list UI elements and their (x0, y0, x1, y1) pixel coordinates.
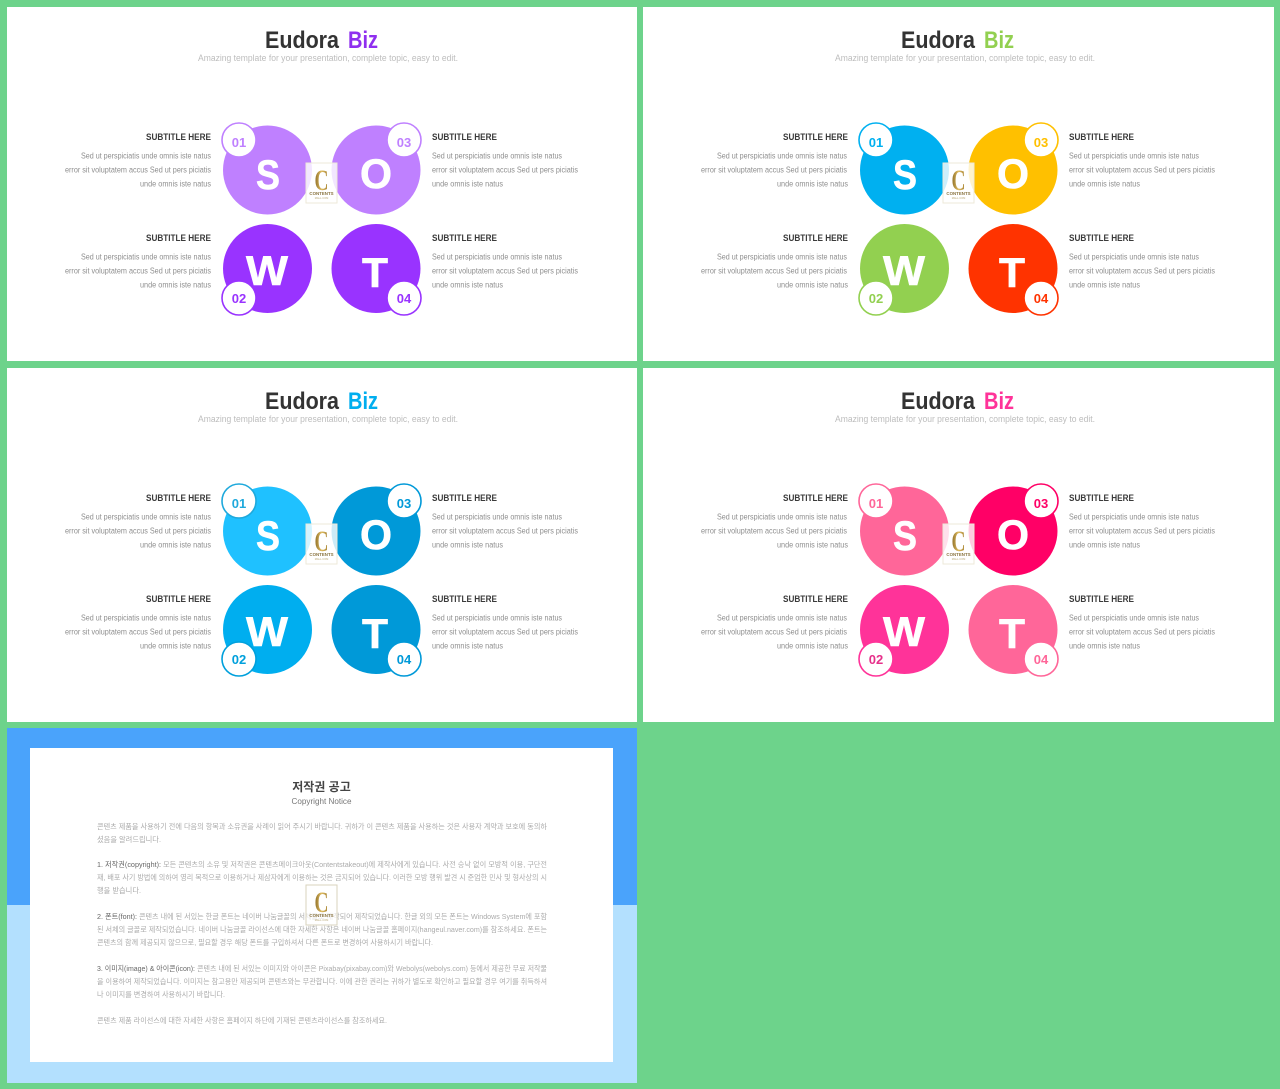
circle W: W (246, 247, 288, 294)
text block: T (1069, 233, 1215, 290)
circle O: O (997, 150, 1029, 197)
text block: W: Sed ut perspiciatis unde omnis iste natus (717, 614, 847, 622)
logo: CONTENTS (309, 552, 334, 557)
text block: O: SUBTITLE HERE (1069, 493, 1134, 503)
text block: S: unde omnis iste natus (140, 180, 211, 188)
text block: W: unde omnis iste natus (777, 280, 848, 290)
copyright heading: Copyright Notice (292, 796, 352, 806)
text block: W: Sed ut perspiciatis unde omnis iste natus (81, 252, 211, 262)
logo: MALL.COM (315, 196, 328, 200)
logo (943, 163, 974, 203)
logo: MALL.COM (952, 557, 965, 561)
circle O: 03 (1034, 135, 1048, 150)
text block: T: SUBTITLE HERE (432, 594, 497, 604)
text block: W: error sit voluptatem accus Sed ut pers piciatis (65, 628, 211, 636)
text block: O: error sit voluptatem accus Sed ut pers piciatis (432, 166, 578, 174)
logo: CONTENTS (946, 552, 971, 557)
text block: W: unde omnis iste natus (140, 642, 211, 650)
text block: O: error sit voluptatem accus Sed ut pers piciatis (1069, 166, 1215, 174)
circle W: 02 (232, 291, 246, 306)
text block: T (432, 594, 578, 650)
logo: C (314, 886, 328, 919)
text block: S (701, 132, 848, 188)
circle T: 04 (1034, 291, 1049, 306)
circle T: T (999, 610, 1025, 657)
panel: copyright notice (7, 728, 637, 1083)
text block: S: SUBTITLE HERE (146, 493, 211, 503)
panel: purple SWOT slide (7, 7, 637, 361)
circle O (332, 484, 421, 576)
circle S: 01 (232, 135, 246, 150)
text block: W (701, 594, 848, 650)
section 1: copyright: 모든 콘텐츠의 소유 및 저작권은 콘텐츠메이크아웃(Contentstakeout)에 제작사에게 있습니다. 사전 승낙 없이 모방적 이용, 구단전 (163, 859, 547, 869)
text block: W: unde omnis iste natus (777, 642, 848, 650)
text block: T: error sit voluptatem accus Sed ut pers piciatis (432, 628, 578, 636)
text block: W: SUBTITLE HERE (783, 594, 848, 604)
circle W (859, 224, 949, 315)
intro paragraph (97, 821, 547, 844)
text block: W (701, 233, 848, 290)
text block: S: error sit voluptatem accus Sed ut pers piciatis (65, 526, 211, 536)
logo: CONTENTS (946, 191, 971, 196)
circle S: 01 (232, 496, 246, 511)
circle O (968, 123, 1058, 214)
panel: multicolour SWOT slide (643, 7, 1274, 361)
text block: T (1069, 594, 1215, 650)
text block: T: unde omnis iste natus (1069, 280, 1140, 290)
text block: W: error sit voluptatem accus Sed ut pers piciatis (701, 266, 847, 276)
circle W: 02 (869, 652, 883, 667)
text block: T: error sit voluptatem accus Sed ut pers piciatis (1069, 628, 1215, 636)
text block: W: unde omnis iste natus (140, 280, 211, 290)
text block: S: Sed ut perspiciatis unde omnis iste natus (717, 152, 847, 160)
text block: O: Sed ut perspiciatis unde omnis iste natus (432, 152, 562, 160)
text block: T: unde omnis iste natus (432, 280, 503, 290)
text block: S: error sit voluptatem accus Sed ut pers piciatis (701, 526, 847, 536)
circle W (222, 585, 312, 676)
intro paragraph: 셨음을 알려드립니다. (97, 834, 161, 844)
text block: T: unde omnis iste natus (1069, 642, 1140, 650)
section 3: image and icon: 을 이용하여 제작되었습니다. 이미지는 참고용만 제공되며 콘텐츠와는 무관합니다. 이에 관한 권리는 귀하가 별도로 확인하고 필요할 경우 여기를 취득하셔 (97, 976, 547, 986)
circle S: S (893, 151, 917, 198)
text block: T: Sed ut perspiciatis unde omnis iste natus (1069, 252, 1199, 262)
text block: O: SUBTITLE HERE (432, 493, 497, 503)
text block: S: unde omnis iste natus (777, 540, 848, 550)
logo (306, 163, 337, 203)
text block: W (65, 594, 211, 650)
circle T: 04 (397, 291, 412, 306)
title: Eudora (901, 388, 976, 415)
circle O (332, 123, 421, 214)
circle S: S (893, 512, 917, 559)
tagline: Amazing template for your presentation, complete topic, easy to edit. (198, 414, 458, 424)
text block: O: Sed ut perspiciatis unde omnis iste natus (1069, 152, 1199, 160)
text block: O: unde omnis iste natus (432, 540, 503, 550)
text block: T: Sed ut perspiciatis unde omnis iste natus (1069, 614, 1199, 622)
logo (306, 524, 337, 564)
title: Eudora (265, 388, 340, 415)
text block: T: Sed ut perspiciatis unde omnis iste natus (432, 614, 562, 622)
circle T (968, 224, 1058, 315)
logo: MALL.COM (952, 196, 965, 200)
circle T: 04 (1034, 652, 1049, 667)
logo: CONTENTS (309, 913, 334, 918)
circle W: W (246, 608, 288, 655)
text block: O (432, 132, 578, 188)
text block: O (1069, 132, 1215, 188)
circle W: W (883, 608, 925, 655)
text block: T: Sed ut perspiciatis unde omnis iste natus (432, 252, 562, 262)
panel: pink SWOT slide (643, 368, 1274, 722)
logo: MALL.COM (315, 918, 328, 922)
section 1: copyright (97, 859, 547, 895)
circle T (332, 224, 421, 315)
circle S (222, 484, 312, 576)
circle S: S (256, 151, 280, 198)
circle S (859, 484, 949, 576)
logo (306, 885, 337, 925)
text block: O (432, 493, 578, 550)
section 2: font: 된 서체의 글꼴로 제작되었습니다. 네이버 나눔글꼴 라이선스에 대한 자세한 사항은 네이버 나눔글꼴 홈페이지(hangeul.naver.com)를 참조하세요. 폰트는 (97, 924, 547, 934)
closing line: 콘텐츠 제품 라이선스에 대한 자세한 사항은 홈페이지 하단에 기재된 콘텐츠라이선스를 참조하세요. (97, 1015, 387, 1025)
section 3: image and icon: 콘텐츠 내에 된 서있는 이미지와 아이콘은 Pixabay(pixabay.com)와 Webolys(webolys.com) 등에서 제공한 무료 저작물 (197, 963, 547, 973)
text block: S: unde omnis iste natus (777, 180, 848, 188)
text block: O: error sit voluptatem accus Sed ut pers piciatis (432, 526, 578, 536)
text block: S: Sed ut perspiciatis unde omnis iste natus (81, 512, 211, 522)
panel: blue SWOT slide (7, 368, 637, 722)
circle T: T (362, 249, 388, 296)
text block: O: Sed ut perspiciatis unde omnis iste natus (1069, 512, 1199, 522)
text block: O (1069, 493, 1215, 550)
text block: S (701, 493, 848, 550)
circle O: 03 (397, 496, 411, 511)
text block: S: SUBTITLE HERE (783, 493, 848, 503)
text block: W: SUBTITLE HERE (146, 594, 211, 604)
intro paragraph: 콘텐츠 제품을 사용하기 전에 다음의 항목과 소유권을 사례이 읽어 주시기 바랍니다. 귀하가 이 콘텐츠 제품을 사용하는 것은 사용자 계약과 보호에 동의하 (97, 821, 547, 831)
title: Biz (984, 27, 1014, 54)
circle S: 01 (869, 135, 883, 150)
section 2: font: 2. 폰트(font): (97, 912, 137, 921)
text block: W: SUBTITLE HERE (783, 233, 848, 243)
tagline: Amazing template for your presentation, complete topic, easy to edit. (835, 53, 1095, 63)
section 3: image and icon: 3. 이미지(image) & 아이콘(icon): (97, 963, 195, 973)
text block: S: Sed ut perspiciatis unde omnis iste natus (81, 152, 211, 160)
logo: C (314, 525, 328, 558)
text block: S (65, 132, 211, 188)
text block: T: error sit voluptatem accus Sed ut pers piciatis (1069, 266, 1215, 276)
circle T: T (999, 249, 1025, 296)
text block: O: unde omnis iste natus (432, 180, 503, 188)
text block: T: SUBTITLE HERE (432, 233, 497, 243)
text block: T: SUBTITLE HERE (1069, 233, 1134, 243)
logo: C (314, 164, 328, 197)
text block: S: error sit voluptatem accus Sed ut pers piciatis (65, 166, 211, 174)
copyright heading: 저작권 공고 (292, 779, 351, 794)
section 2: font: 콘텐츠의 함께 제공되지 않으므로, 필요할 경우 해당 폰트를 구입하셔서 다른 폰트로 변경하여 사용하시기 바랍니다. (97, 937, 433, 947)
text block: T: unde omnis iste natus (432, 642, 503, 650)
section 1: copyright: 행을 받습니다. (97, 885, 141, 895)
circle T: T (362, 610, 388, 657)
circle O: 03 (1034, 496, 1048, 511)
copyright heading (292, 779, 352, 806)
title: Eudora (901, 27, 976, 54)
text block: S: unde omnis iste natus (140, 540, 211, 550)
circle O (968, 484, 1058, 576)
logo: CONTENTS (309, 191, 334, 196)
text block: W (65, 233, 211, 290)
circle W (859, 585, 949, 676)
circle O: O (997, 511, 1029, 558)
text block: W: Sed ut perspiciatis unde omnis iste natus (717, 252, 847, 262)
text block: O: unde omnis iste natus (1069, 540, 1140, 550)
text block: W: SUBTITLE HERE (146, 233, 211, 243)
text block: W: error sit voluptatem accus Sed ut pers piciatis (65, 266, 211, 276)
text block: T (432, 233, 578, 290)
text block: O: unde omnis iste natus (1069, 180, 1140, 188)
title: Biz (348, 27, 378, 54)
logo: MALL.COM (315, 557, 328, 561)
text block: O: Sed ut perspiciatis unde omnis iste natus (432, 512, 562, 522)
text block: O: error sit voluptatem accus Sed ut pers piciatis (1069, 526, 1215, 536)
text block: S: SUBTITLE HERE (146, 132, 211, 142)
circle W (222, 224, 312, 315)
title: Biz (348, 388, 378, 415)
section 1: copyright: 재, 배포 사기 방법에 의하여 영리 목적으로 이용하거나 제삼자에게 이용하는 것은 금지되어 있습니다. 이러한 모방 행위 발견 시 준엄한 민사 및 형사상의 시 (97, 872, 547, 882)
circle S (859, 123, 949, 214)
circle T (968, 585, 1058, 676)
section 3: image and icon: 나 이미지를 변경하여 사용하시기 바랍니다. (97, 989, 225, 999)
circle S: 01 (869, 496, 883, 511)
section 2: font: 콘텐츠 내에 된 서있는 한글 폰트는 네이버 나눔글꼴의 서체들로 제작되어 제작되었습니다. 한글 외의 모든 폰트는 Windows System에 포함 (139, 911, 547, 921)
section 1: copyright: 1. 저작권(copyright): (97, 859, 161, 869)
circle O: O (360, 511, 392, 558)
text block: S: Sed ut perspiciatis unde omnis iste natus (717, 512, 847, 522)
logo: C (952, 525, 966, 558)
text block: T: SUBTITLE HERE (1069, 594, 1134, 604)
text block: T: error sit voluptatem accus Sed ut pers piciatis (432, 266, 578, 276)
circle T: 04 (397, 652, 412, 667)
circle W: 02 (869, 291, 883, 306)
tagline: Amazing template for your presentation, complete topic, easy to edit. (835, 414, 1095, 424)
text block: W: error sit voluptatem accus Sed ut pers piciatis (701, 628, 847, 636)
text block: O: SUBTITLE HERE (432, 132, 497, 142)
text block: S: SUBTITLE HERE (783, 132, 848, 142)
text block: S (65, 493, 211, 550)
circle T (332, 585, 421, 676)
circle W: W (883, 247, 925, 294)
title: Biz (984, 388, 1014, 415)
title: Eudora (265, 27, 340, 54)
logo: C (952, 164, 966, 197)
circle O: O (360, 150, 392, 197)
text block: O: SUBTITLE HERE (1069, 132, 1134, 142)
circle S: S (256, 512, 280, 559)
logo (943, 524, 974, 564)
tagline: Amazing template for your presentation, complete topic, easy to edit. (198, 53, 458, 63)
circle O: 03 (397, 135, 411, 150)
section 2: font (97, 911, 547, 947)
circle W: 02 (232, 652, 246, 667)
text block: S: error sit voluptatem accus Sed ut pers piciatis (701, 166, 847, 174)
circle S (222, 123, 312, 214)
section 3: image and icon (97, 963, 547, 999)
text block: W: Sed ut perspiciatis unde omnis iste natus (81, 614, 211, 622)
